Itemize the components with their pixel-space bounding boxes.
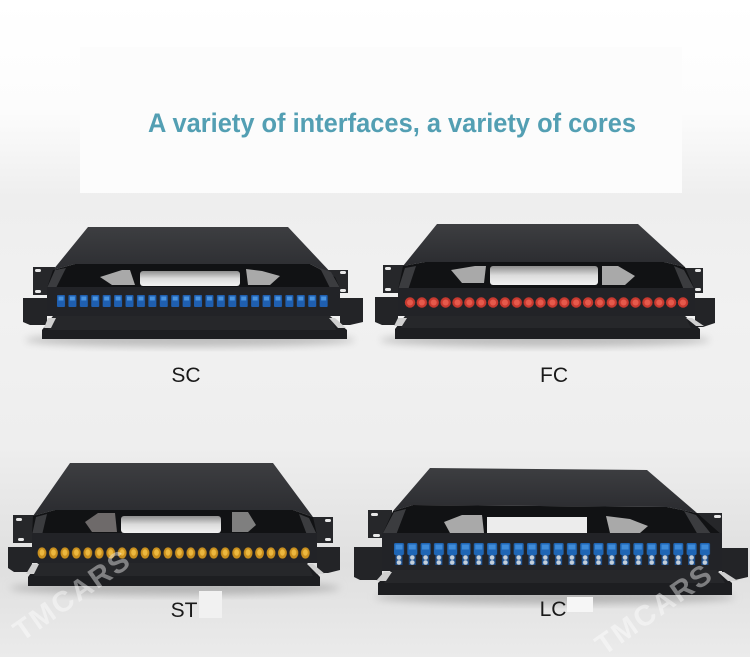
white patch [199, 591, 222, 618]
open tray [32, 510, 317, 535]
splice tray [444, 515, 648, 533]
right mounting ear [695, 513, 722, 538]
left mounting ear [13, 515, 36, 543]
open tray [382, 505, 722, 535]
SC ports [56, 295, 330, 308]
left mounting ear [33, 267, 55, 295]
right flange [722, 548, 748, 580]
splice tray [451, 266, 635, 285]
watermark: right: TMCARS [590, 557, 719, 662]
title: A variety of interfaces, a variety of cores [148, 108, 636, 138]
label: ST: ST [171, 599, 198, 622]
panel: LC patch panel [354, 468, 748, 604]
open tray [398, 262, 695, 290]
right mounting ear [328, 270, 348, 293]
top cover [53, 227, 335, 277]
lower tray [42, 316, 347, 339]
open tray [47, 264, 340, 288]
right flange [695, 298, 715, 327]
left flange [354, 547, 382, 580]
panel: FC patch panel [375, 224, 715, 347]
front panel [47, 287, 340, 316]
lower tray [394, 316, 704, 339]
right flange [340, 298, 363, 325]
right flange [317, 547, 340, 573]
left flange [23, 298, 47, 325]
right mounting ear [310, 517, 333, 543]
splice tray [85, 512, 256, 533]
lower tray [376, 570, 738, 595]
front panel [382, 533, 722, 571]
top cover [403, 224, 685, 267]
left flange [8, 547, 32, 572]
left flange [375, 297, 398, 325]
label: SC: SC [171, 364, 201, 387]
left mounting ear [368, 510, 392, 538]
top cover [33, 463, 313, 517]
ST ports [36, 546, 312, 560]
LC ports [392, 543, 712, 566]
splice tray [100, 269, 280, 286]
label: FC: FC [540, 364, 568, 387]
top cover [393, 468, 697, 513]
label: LC: LC [540, 598, 566, 621]
panel: ST patch panel [8, 463, 340, 595]
left mounting ear [383, 265, 405, 293]
lower tray [26, 563, 325, 586]
FC ports [404, 296, 690, 309]
front panel [32, 533, 317, 563]
front panel [398, 288, 695, 316]
right mounting ear [680, 268, 703, 293]
panel: SC patch panel [23, 227, 363, 347]
white patch [567, 597, 593, 612]
watermark: left: TMCARS [8, 543, 137, 648]
